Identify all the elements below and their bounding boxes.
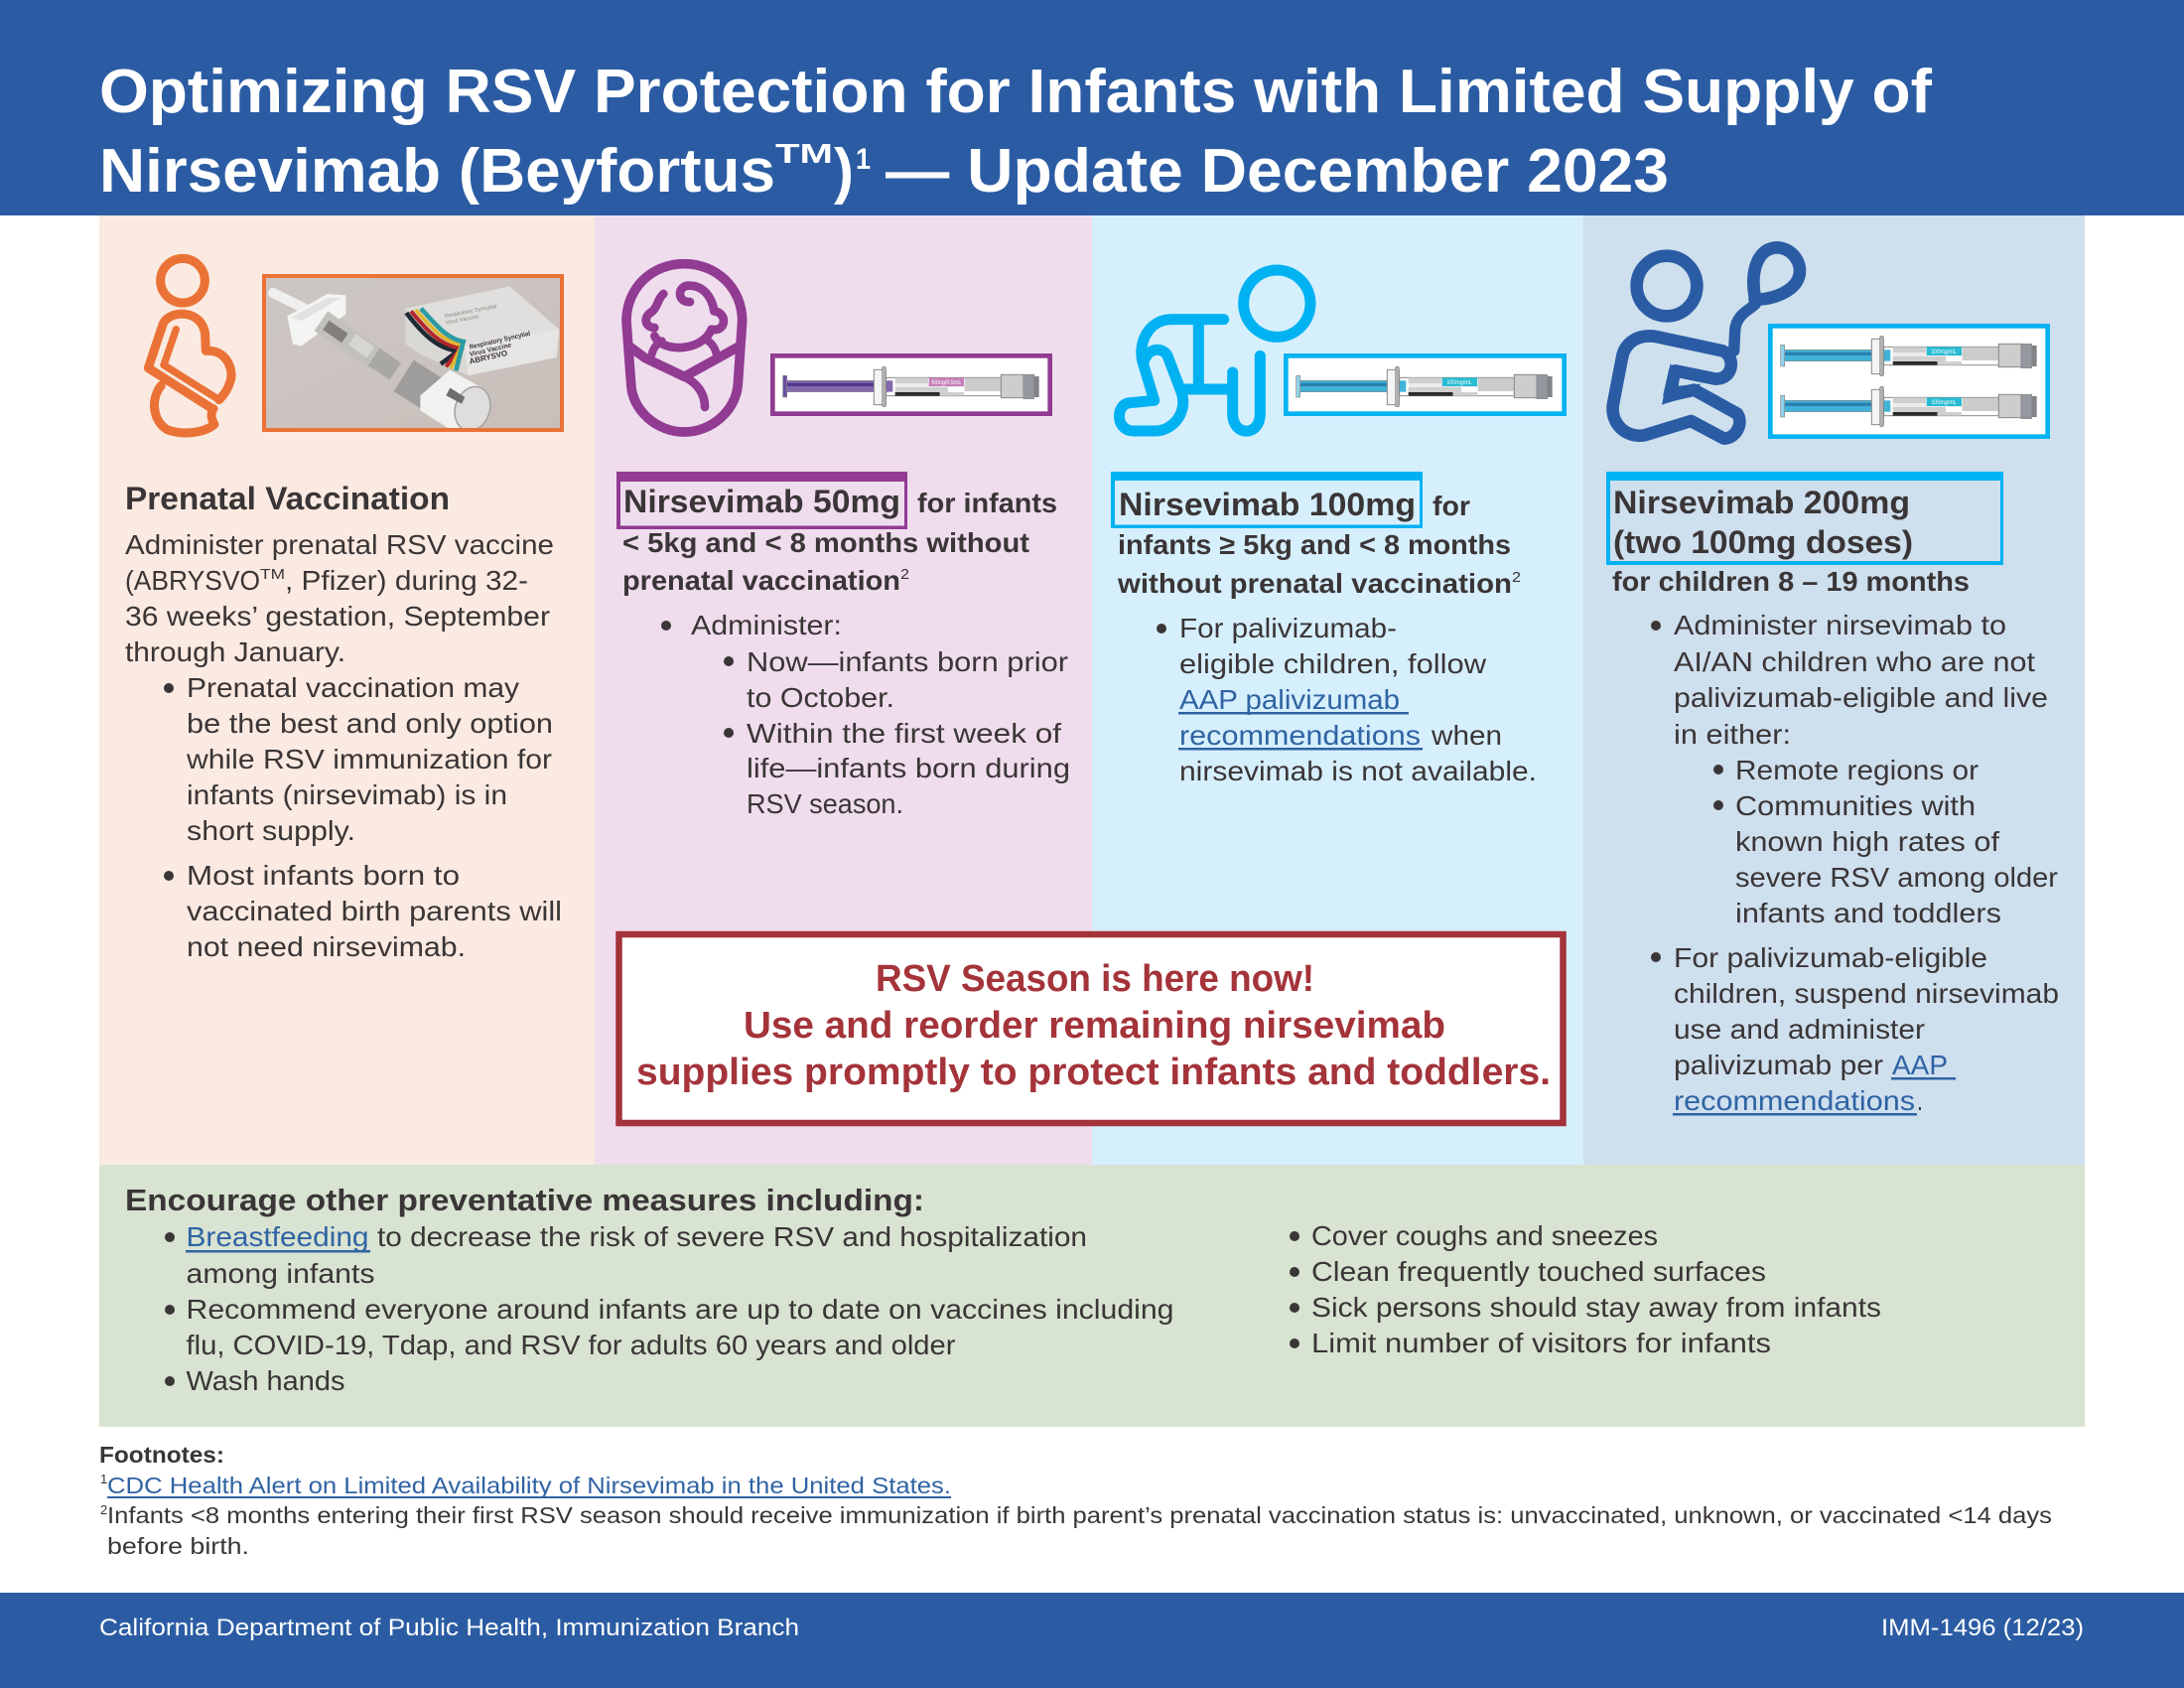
carton: Virus Vaccine <box>469 342 512 358</box>
heading: prenatal vaccination: Prenatal Vaccination <box>125 481 450 516</box>
title: Optimizing RSV Protection for Infants with Limited Supply of <box>99 58 1932 126</box>
left bullet list <box>165 1221 1173 1396</box>
text block: 50mg criteria: 2 <box>900 566 909 583</box>
carton <box>405 286 559 375</box>
bullet: AI/AN children: infants and toddlers <box>1735 898 2001 928</box>
panel: nirsevimab 50mg <box>595 215 1092 1165</box>
text block: 50mg criteria: < 5kg and < 8 months without <box>622 527 1029 558</box>
bullet: AI/AN children: severe RSV among older <box>1735 862 2058 893</box>
icon: sitting child with balloon <box>1613 247 1800 439</box>
right bullet list <box>1290 1220 1881 1358</box>
left bullet list: flu, COVID-19, Tdap, and RSV for adults 60 years and older <box>187 1330 955 1360</box>
bullets: administer timing: RSV season. <box>747 788 903 819</box>
bullets: administer timing: life—infants born during <box>747 753 1070 783</box>
left bullet list: Recommend everyone around infants are up to date on vaccines including <box>187 1294 1173 1325</box>
footer: organization: California Department of Public Health, Immunization Branch <box>99 1615 799 1641</box>
heading box: nirsevimab 50mg <box>616 472 907 529</box>
bullet: AI/AN children <box>1651 610 2058 928</box>
panel: nirsevimab 100mg <box>1092 215 1583 1165</box>
carton: ABRYSVO <box>469 349 508 366</box>
footer: document number: IMM-1496 (12/23) <box>1881 1615 2084 1641</box>
bullet: suspend nirsevimab: palivizumab per <box>1674 1050 1883 1080</box>
bullet: palivizumab eligible: recommendations <box>1179 720 1421 751</box>
footnotes: 1 <box>100 1472 107 1486</box>
bullet: palivizumab eligible: eligible children, follow <box>1179 648 1487 679</box>
text block: 50mg criteria: prenatal vaccination <box>622 565 900 596</box>
text block: administer prenatal vaccine: through January. <box>125 636 345 667</box>
panel: prenatal vaccination <box>99 215 595 1165</box>
text block: administer prenatal vaccine: 36 weeks’ gestation, September <box>125 601 550 632</box>
text block: administer prenatal vaccine: , Pfizer) during 32- <box>285 565 528 596</box>
bullet: AI/AN children: Communities with <box>1735 790 1976 821</box>
footnotes: CDC Health Alert on Limited Availability of Nirsevimab in the United States. <box>107 1473 951 1498</box>
carton: Respiratory Syncytial <box>469 331 531 352</box>
right bullet list: Limit number of visitors for infants <box>1311 1328 1771 1358</box>
bullet: AI/AN children: AI/AN children who are not <box>1674 646 2035 677</box>
text block: administer prenatal vaccine: TM <box>260 566 285 583</box>
bullets: administer timing: to October. <box>747 682 894 713</box>
heading box: nirsevimab 200mg <box>1606 472 2003 565</box>
footer banner <box>0 1593 2184 1688</box>
bullet: suspend nirsevimab: . <box>1917 1085 1923 1116</box>
icon: swaddled newborn <box>626 264 743 432</box>
title <box>99 58 1932 206</box>
panel: nirsevimab 200mg <box>1583 215 2085 1165</box>
bullet: palivizumab eligible: nirsevimab is not available. <box>1179 756 1537 786</box>
heading box: nirsevimab 100mg <box>1111 472 1423 528</box>
callout: RSV season is here: Use and reorder remaining nirsevimab <box>744 1005 1445 1047</box>
footnotes: 2 <box>100 1502 107 1517</box>
right bullet list: Clean frequently touched surfaces <box>1311 1256 1766 1287</box>
text block: administer prenatal vaccine <box>125 529 554 667</box>
text block: 100mg criteria: without prenatal vaccination <box>1117 568 1512 599</box>
title: — Update December 2023 <box>886 137 1669 206</box>
text block: 50mg criteria <box>622 488 1057 596</box>
bullet: palivizumab eligible: when <box>1431 720 1502 751</box>
bullet: most infants <box>164 860 562 962</box>
syringe image two 100mg doses: 100mg/mL <box>1931 399 1957 406</box>
title: Nirsevimab (Beyfortus <box>99 137 775 206</box>
bullet: prenatal may be best option: be the best and only option <box>187 708 553 739</box>
bullet: prenatal may be best option: Prenatal vaccination may <box>187 672 519 703</box>
carton: Respiratory Syncytial <box>445 304 497 320</box>
text block: administer prenatal vaccine: Administer prenatal RSV vaccine <box>125 529 554 560</box>
left bullet list: to decrease the risk of severe RSV and hospitalization <box>377 1221 1087 1252</box>
bullet: prenatal may be best option: short supply. <box>187 815 355 846</box>
bullet: prenatal may be best option <box>164 672 553 846</box>
title: 1 <box>856 143 871 176</box>
bullets: administer timing <box>661 610 1070 819</box>
bullet: most infants: vaccinated birth parents will <box>187 896 562 926</box>
text block: 50mg criteria: for infants <box>917 488 1057 518</box>
title: TM <box>775 138 833 169</box>
callout: RSV season is here: supplies promptly to protect infants and toddlers. <box>636 1052 1551 1093</box>
syringe image 50mg: 50mg/0.5mL <box>931 379 962 386</box>
right bullet list: Sick persons should stay away from infants <box>1311 1292 1881 1323</box>
carton: Virus Vaccine <box>446 314 479 327</box>
footnotes: Footnotes: <box>99 1442 224 1468</box>
left bullet list: among infants <box>187 1258 375 1289</box>
text block: 100mg criteria: for <box>1433 491 1470 521</box>
bullet: suspend nirsevimab: recommendations <box>1674 1085 1915 1116</box>
callout: RSV season is here <box>619 934 1563 1123</box>
heading: encourage other measures: Encourage other preventative measures including: <box>125 1183 924 1217</box>
vaccine product photo <box>264 276 562 436</box>
callout: RSV season is here: RSV Season is here now! <box>876 958 1314 1000</box>
syringe image 100mg: 100mg/mL <box>1446 379 1472 386</box>
bullet: prenatal may be best option: while RSV immunization for <box>186 744 552 774</box>
footnotes: Infants <8 months entering their first RSV season should receive immunization if birth parent’s prenatal vaccination status is: unvaccinated, unknown, or vaccinated <14 days <box>107 1502 2052 1528</box>
bullet: suspend nirsevimab <box>1651 942 2059 1116</box>
icon: crawling infant <box>1119 270 1310 431</box>
footnotes: before birth. <box>107 1533 249 1559</box>
heading box: nirsevimab 200mg: (two 100mg doses) <box>1613 524 1913 560</box>
heading box: nirsevimab 50mg: Nirsevimab 50mg <box>623 484 900 519</box>
text block: 100mg criteria: infants ≥ 5kg and < 8 months <box>1118 529 1511 560</box>
syringe image two 100mg doses <box>1770 326 2048 437</box>
bullet: most infants: not need nirsevimab. <box>187 931 466 962</box>
bullet: suspend nirsevimab: children, suspend nirsevimab <box>1674 978 2059 1009</box>
bullets: administer timing: Now—infants born prior <box>747 646 1068 677</box>
icon: pregnant person <box>148 258 231 433</box>
bullet: AI/AN children: known high rates of <box>1735 826 1999 857</box>
bullet: suspend nirsevimab: AAP <box>1892 1050 1948 1080</box>
bullet: AI/AN children: Remote regions or <box>1735 755 1979 785</box>
syringe image two 100mg doses: 100mg/mL <box>1931 349 1957 355</box>
syringe image 100mg <box>1286 355 1565 414</box>
bullets: administer timing: Administer: <box>691 610 842 640</box>
text: for children 8-19 months: for children 8 – 19 months <box>1612 566 1970 597</box>
bullet: palivizumab eligible <box>1157 613 1537 786</box>
text block: 100mg criteria <box>1117 491 1521 599</box>
bullet: AI/AN children: palivizumab-eligible and live <box>1674 682 2048 713</box>
bullet: AI/AN children: in either: <box>1674 719 1791 750</box>
header banner <box>0 0 2184 215</box>
bullet: suspend nirsevimab: For palivizumab-eligible <box>1674 942 1987 973</box>
text block: administer prenatal vaccine: (ABRYSVO <box>125 565 260 596</box>
bullets: administer timing: Within the first week of <box>747 718 1061 749</box>
right bullet list: Cover coughs and sneezes <box>1311 1220 1658 1251</box>
footnotes <box>99 1442 2052 1559</box>
left bullet list: Breastfeeding <box>187 1221 369 1252</box>
title: ) <box>834 137 854 206</box>
heading box: nirsevimab 100mg: Nirsevimab 100mg <box>1119 487 1416 522</box>
syringe image 50mg <box>772 355 1050 414</box>
text block: 100mg criteria: 2 <box>1512 569 1521 586</box>
bullet: palivizumab eligible: For palivizumab- <box>1179 613 1397 643</box>
bullet: most infants: Most infants born to <box>187 860 460 891</box>
bullet: AI/AN children: Administer nirsevimab to <box>1674 610 2006 640</box>
syringe <box>273 293 495 436</box>
panel: other preventative measures <box>99 1165 2085 1427</box>
bullet: suspend nirsevimab: use and administer <box>1674 1014 1925 1045</box>
heading box: nirsevimab 200mg: Nirsevimab 200mg <box>1613 485 1910 520</box>
bullet: prenatal may be best option: infants (nirsevimab) is in <box>187 779 507 810</box>
left bullet list: Wash hands <box>187 1365 345 1396</box>
bullet: palivizumab eligible: AAP palivizumab <box>1179 684 1400 715</box>
